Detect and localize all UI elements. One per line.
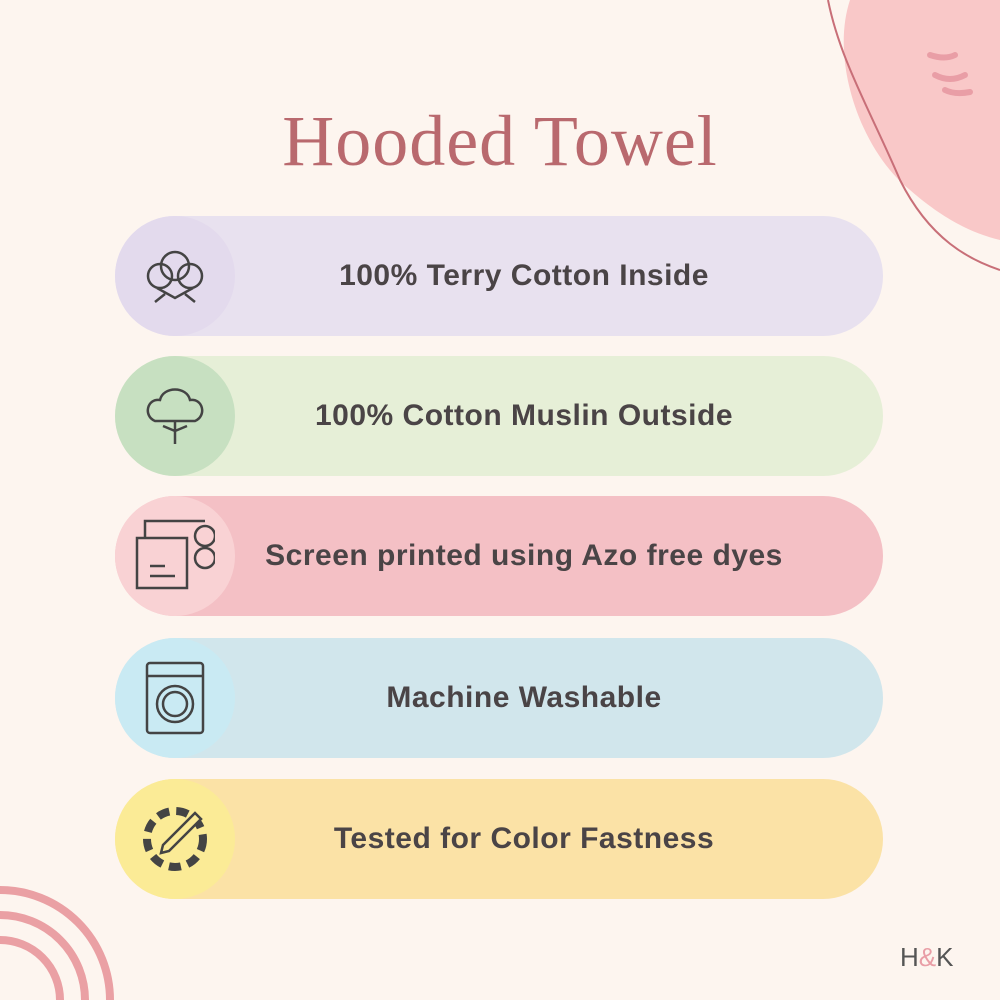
panel: color fastness: Tested for Color Fastness [334, 822, 714, 855]
panel: terry cotton: 100% Terry Cotton Inside [339, 259, 709, 292]
panel: muslin: 100% Cotton Muslin Outside [315, 399, 733, 432]
icon: cotton plant [115, 356, 235, 476]
icon: printer roll [115, 496, 235, 616]
title: Hooded Towel [282, 101, 718, 181]
panel: washable: Machine Washable [386, 681, 662, 714]
panel: screen printed: Screen printed using Azo free dyes [265, 539, 783, 572]
panel: color fastness [115, 779, 883, 899]
panel: terry cotton [115, 216, 883, 336]
icon: washing machine [115, 638, 235, 758]
panel: muslin [115, 356, 883, 476]
logo: H&K [900, 942, 953, 972]
panel: washable [115, 638, 883, 758]
panel: screen printed [115, 496, 883, 616]
icon: cotton [115, 216, 235, 336]
icon: dropper [115, 779, 235, 899]
